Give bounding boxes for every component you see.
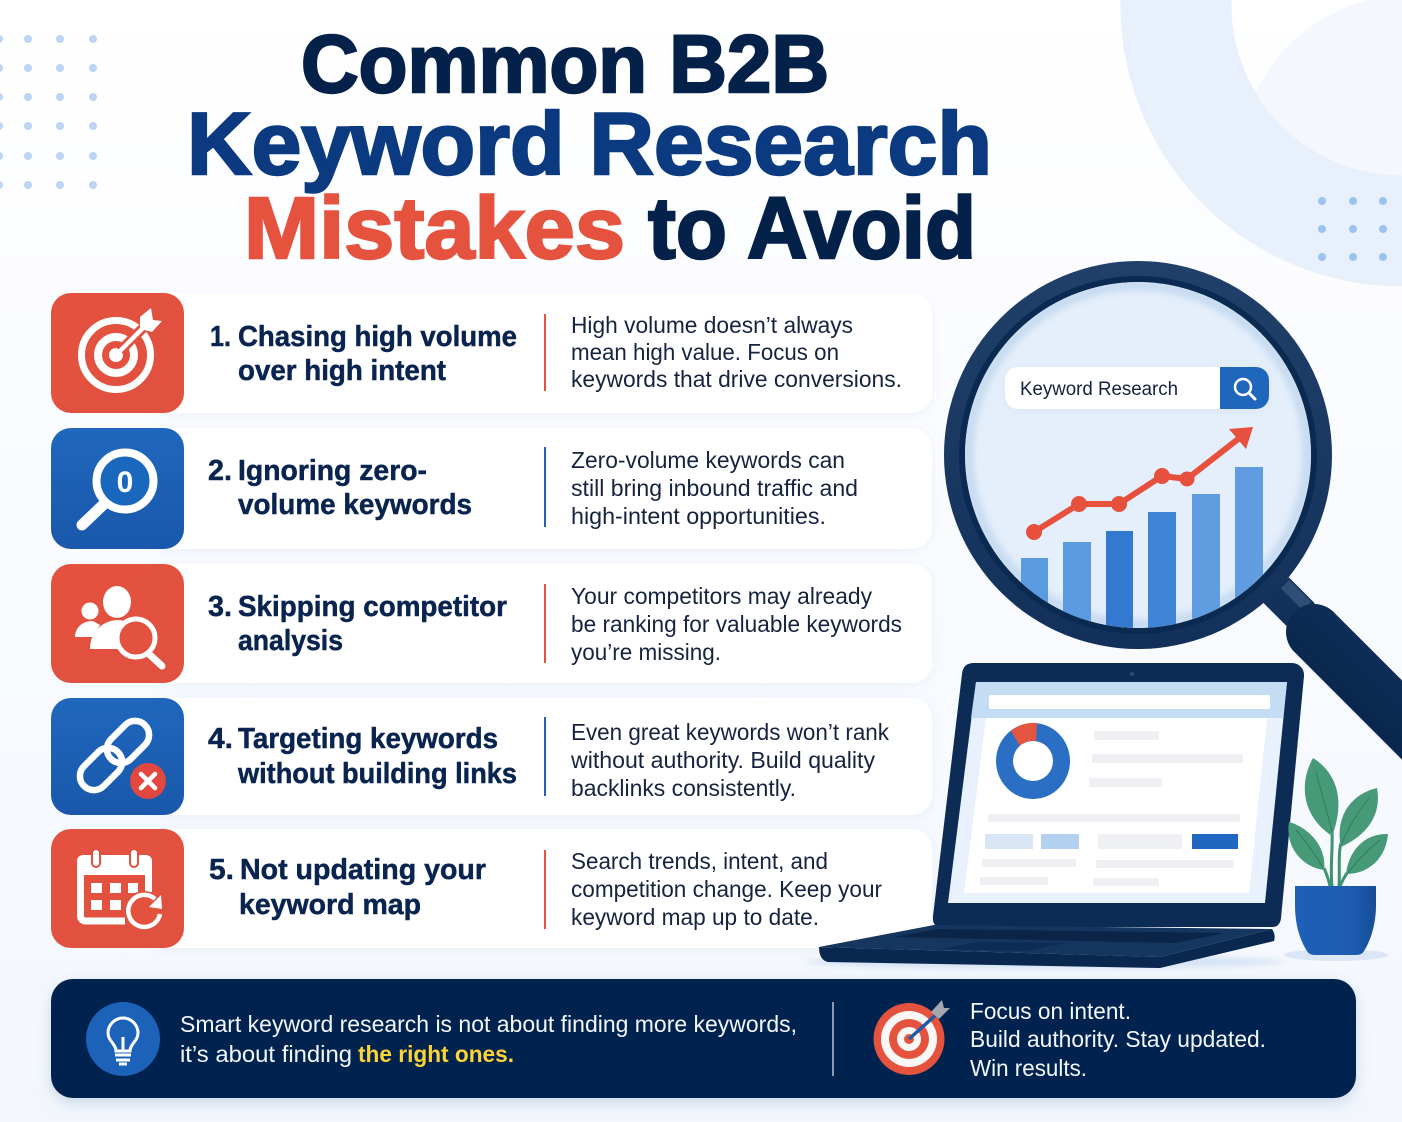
- icon: target with dart: [874, 1000, 950, 1075]
- panel: mistake 2: still bring inbound traffic and: [571, 475, 858, 501]
- panel: mistake 3: you’re missing.: [571, 639, 721, 665]
- footer message: [180, 1011, 797, 1067]
- bar chart: [1021, 467, 1263, 638]
- panel: mistake 2: Zero-volume keywords can: [571, 447, 845, 473]
- panel: mistake 1: 1.: [210, 321, 231, 353]
- panel: mistake 2: Ignoring zero-: [238, 455, 427, 487]
- panel: mistake 2: volume keywords: [238, 489, 472, 521]
- panel: mistake 3: analysis: [238, 625, 343, 657]
- footer takeaways: Win results.: [970, 1055, 1087, 1081]
- title: Common B2B: [301, 19, 829, 110]
- panel: mistake 1: Chasing high volume: [238, 321, 517, 353]
- title: to Avoid: [648, 180, 976, 277]
- panel: mistake 4: 4.: [208, 723, 233, 755]
- panel: mistake 4: Even great keywords won’t rank: [571, 719, 889, 745]
- panel: mistake 2: [51, 428, 932, 549]
- panel: mistake 3: [51, 564, 932, 683]
- panel: mistake 4: without building links: [237, 758, 517, 790]
- panel: mistake 2: high-intent opportunities.: [571, 503, 826, 529]
- panel: mistake 5: Search trends, intent, and: [571, 848, 828, 874]
- laptop screen: [948, 682, 1287, 903]
- panel: mistake 1: over high intent: [238, 355, 446, 387]
- magnifier glass: [960, 280, 1320, 638]
- panel: mistake 5: competition change. Keep your: [571, 876, 882, 902]
- dot grid top left: [0, 35, 97, 189]
- footer message: Smart keyword research is not about finding more keywords,: [180, 1011, 797, 1037]
- panel: mistake 2: 2.: [208, 455, 232, 487]
- panel: mistake 5: keyword map up to date.: [571, 904, 819, 930]
- panel: mistake 4: [51, 698, 932, 815]
- footer message: it’s about finding: [180, 1041, 352, 1067]
- panel: mistake 1: mean high value. Focus on: [571, 339, 839, 365]
- title: Mistakes: [244, 180, 625, 277]
- laptop lid: [933, 663, 1304, 927]
- panel: mistake 5: keyword map: [239, 889, 421, 921]
- magnifier rim: [944, 261, 1332, 649]
- panel: mistake 1: High volume doesn’t always: [571, 312, 853, 338]
- panel: mistake 1: [51, 293, 932, 413]
- panel: mistake 4: backlinks consistently.: [571, 775, 796, 801]
- panel: mistake 3: 3.: [208, 591, 232, 623]
- footer takeaways: Build authority. Stay updated.: [970, 1026, 1266, 1052]
- title: Keyword Research: [187, 94, 992, 193]
- footer takeaways: [970, 998, 1266, 1081]
- search bar: [1005, 367, 1269, 409]
- footer message: the right ones.: [358, 1041, 514, 1067]
- panel: mistake 5: 5.: [209, 854, 234, 886]
- icon: magnifier with zero: [82, 452, 154, 525]
- icon: magnifier with zero: 0: [117, 466, 133, 499]
- panel: mistake 4: Targeting keywords: [238, 723, 498, 755]
- icon: light bulb: [86, 1002, 160, 1076]
- illustration: laptop: [805, 663, 1304, 969]
- panel: mistake 5: [51, 829, 932, 948]
- icon: target with arrow: [82, 308, 162, 390]
- decorative circles top right: [1176, 0, 1402, 342]
- illustration: potted plant: [1284, 758, 1388, 961]
- laptop base: [819, 925, 1275, 968]
- magnifier handle: [1276, 584, 1402, 778]
- search bar: Keyword Research: [1020, 379, 1178, 400]
- trend line with arrow: [1026, 427, 1253, 540]
- icon: competitors with magnifier: [75, 586, 162, 666]
- panel: mistake 5: Not updating your: [240, 854, 486, 886]
- panel: mistake 1: keywords that drive conversions.: [571, 366, 902, 392]
- dot grid top right: [1318, 197, 1387, 261]
- footer takeaways: Focus on intent.: [970, 998, 1131, 1024]
- panel: mistake 3: be ranking for valuable keywords: [571, 611, 902, 637]
- footer banner: [51, 979, 1356, 1098]
- icon: broken chain link: [74, 715, 166, 799]
- illustration: magnifying glass with chart: [944, 261, 1402, 778]
- donut chart: [996, 723, 1070, 799]
- icon: search: [1235, 379, 1255, 399]
- title: [187, 19, 992, 277]
- panel: mistake 3: Your competitors may already: [571, 583, 872, 609]
- panel: mistake 3: Skipping competitor: [238, 591, 507, 623]
- icon: calendar with refresh: [77, 849, 164, 931]
- panel: mistake 4: without authority. Build quality: [570, 747, 875, 773]
